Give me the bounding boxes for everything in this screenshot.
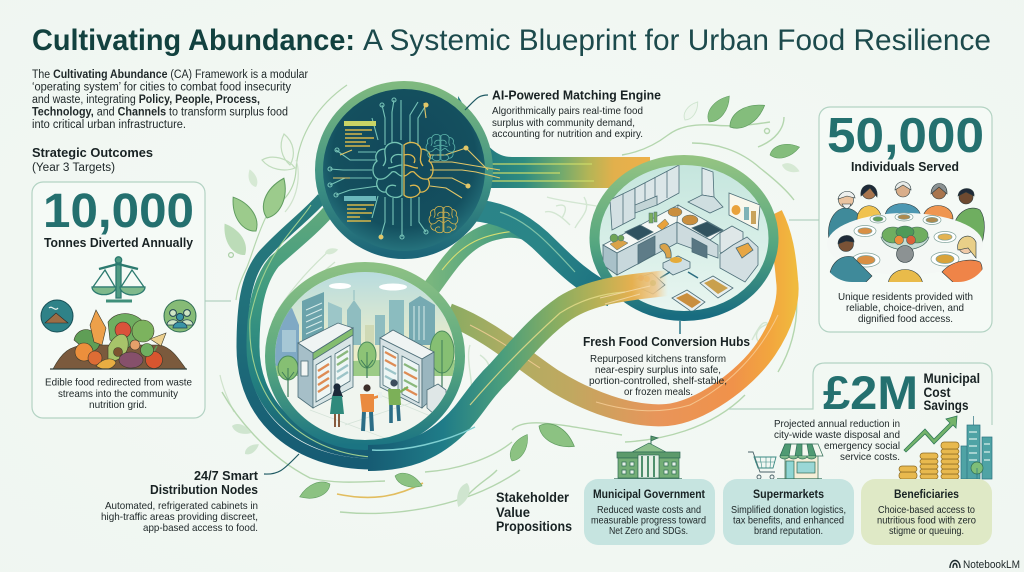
heading: stakeholder value propositions: Value [496, 505, 530, 520]
intro text block: and waste, integrating Policy, People, Process, [32, 94, 260, 106]
card: municipal government: Reduced waste costs and [597, 505, 701, 516]
icon: supermarket storefront [777, 444, 823, 479]
card caption: reliable, choice-driven, and [846, 302, 964, 314]
icon: rising trend arrow [904, 416, 957, 452]
table [828, 213, 983, 246]
callout: fresh food conversion hubs: near-espiry surplus into safe, [595, 364, 721, 376]
card caption: streams into the community [58, 388, 179, 400]
callout: 24/7 smart distribution nodes: app-based access to food. [143, 522, 258, 534]
counter run right [677, 205, 723, 240]
icon: compost circle [41, 300, 73, 332]
callout: 24/7 smart distribution nodes: high-traffic areas providing discreet, [101, 511, 258, 523]
trees [278, 331, 454, 398]
ribbon: main loop, lower right over hub [368, 283, 668, 458]
card: municipal government: Net Zero and SDGs. [609, 526, 688, 537]
stat label: Cost [924, 385, 951, 400]
vines: leaves top right [469, 92, 801, 395]
stat label [924, 371, 980, 413]
ribbon: AI engine to conversion hub [458, 96, 650, 188]
illustration: people at shared table [827, 182, 984, 286]
card: 10,000 tonnes diverted [32, 182, 205, 418]
city and park scene [270, 283, 455, 445]
card: £2M municipal cost savings [729, 363, 992, 479]
card: municipal government: Municipal Government [593, 489, 705, 501]
callout: fresh food conversion hubs [583, 335, 750, 398]
card: supermarkets: Simplified donation logistics, [731, 505, 846, 516]
card caption: Edible food redirected from waste [45, 376, 192, 388]
card caption [838, 291, 973, 325]
card caption [45, 376, 192, 411]
callout: 24/7 smart distribution nodes [101, 468, 259, 534]
person: man green [388, 379, 408, 423]
brain: central [373, 142, 433, 197]
stat: 10,000: 10,000 [43, 185, 194, 238]
illustration: food pile on compost [53, 310, 186, 369]
title: bold part: Cultivating Abundance: [32, 24, 355, 57]
person: man orange [360, 384, 382, 431]
leader: hub to caption [679, 321, 681, 334]
card: municipal government [584, 479, 715, 545]
meal tray 2 [700, 276, 733, 298]
heading: stakeholder value propositions [496, 490, 572, 534]
callout: 24/7 smart distribution nodes: Distribution Nodes [150, 482, 258, 497]
card caption: emergency social [824, 440, 900, 452]
callout: AI-powered matching engine [492, 88, 661, 140]
intro text block: into critical urban infrastructure. [32, 119, 186, 131]
callout: 24/7 smart distribution nodes: 24/7 Smart [194, 468, 259, 483]
card: 50,000 individuals served [819, 107, 992, 332]
card caption: Projected annual reduction in [774, 418, 900, 430]
menu board [729, 193, 760, 230]
ground [275, 360, 455, 378]
upper cabinets [610, 188, 635, 230]
stat label: Tonnes Diverted Annually [44, 236, 193, 250]
heading: stakeholder value propositions: Stakeholder [496, 490, 570, 505]
NotebookLM logo: NotebookLM [963, 559, 1020, 571]
card caption: nutrition grid. [89, 399, 147, 411]
card: beneficiaries: nutritious food with zero [877, 516, 976, 526]
icon: coin stacks [899, 442, 959, 479]
vending machine left [298, 323, 353, 408]
callout: fresh food conversion hubs: portion-controlled, shelf-stable, [589, 375, 727, 387]
card: supermarkets: Supermarkets [753, 489, 824, 501]
strategic outcomes heading: (Year 3 Targets) [32, 162, 115, 174]
callout: fresh food conversion hubs: Fresh Food Conversion Hubs [583, 335, 750, 349]
card caption: city-wide waste disposal and [774, 429, 900, 441]
icon: shopping cart [748, 452, 776, 479]
brain: small teal [426, 134, 455, 161]
card caption: Unique residents provided with [838, 291, 973, 303]
intro text block: Technology, and Channels to transform surplus food [32, 106, 288, 118]
callout: AI-powered matching engine: AI-Powered Matching Engine [492, 88, 661, 102]
skyline [270, 290, 435, 370]
ribbon: main loop, left side [242, 198, 372, 464]
title: regular part: A Systemic Blueprint for Urban Food Resilience [363, 24, 991, 57]
heading: stakeholder value propositions: Propositions [496, 519, 572, 534]
veggie crate [642, 272, 666, 294]
crate and arrows [660, 244, 671, 258]
intro text block: ‘operating system’ for cities to combat food insecurity [32, 82, 291, 94]
circle: smart distribution nodes illustration [270, 267, 460, 445]
callout: AI-powered matching engine: Algorithmically pairs real-time food [492, 105, 643, 117]
strategic outcomes heading: Strategic Outcomes [32, 145, 153, 160]
leader: AI engine [465, 95, 488, 110]
stat label: Individuals Served [851, 160, 959, 174]
icon: community circle [164, 300, 196, 332]
intro text block: The Cultivating Abundance (CA) Framework is a modular [32, 69, 308, 81]
card caption: service costs. [840, 451, 900, 463]
callout: fresh food conversion hubs: Repurposed kitchens transform [590, 353, 726, 365]
callout: fresh food conversion hubs: or frozen meals. [624, 386, 693, 398]
person: woman teal dress [330, 383, 344, 427]
plates [852, 213, 959, 267]
salad bowl [881, 226, 929, 250]
code panel: lower [344, 196, 376, 221]
diners: foreground [829, 235, 982, 286]
vending machine right [380, 330, 446, 414]
card: beneficiaries: Choice-based access to [878, 505, 975, 516]
callout: 24/7 smart distribution nodes: Automated, refrigerated cabinets in [105, 500, 258, 512]
card: supermarkets [723, 479, 854, 545]
circuit traces [328, 98, 428, 239]
meal tray 1 [672, 290, 705, 312]
ribbon: orange flow from hubs to nodes [448, 215, 788, 415]
card: beneficiaries [861, 479, 992, 545]
card caption: dignified food access. [858, 313, 953, 325]
ribbon: teal flow from AI engine to hub [472, 210, 612, 296]
vines: leaves left [218, 85, 347, 412]
counter run left [603, 205, 678, 253]
icon: government building [614, 436, 682, 479]
stat: 50,000: 50,000 [827, 109, 984, 163]
leader: distribution nodes [264, 454, 299, 474]
card: beneficiaries: stigme or queuing. [889, 526, 964, 537]
circle: fresh food conversion hub illustration [594, 160, 774, 316]
card: beneficiaries: Beneficiaries [894, 489, 959, 501]
intro text block [32, 69, 308, 131]
icon: city skyline [961, 416, 992, 479]
circle: AI matching engine illustration [319, 85, 500, 255]
clouds [329, 283, 407, 290]
kitchen interior [603, 165, 760, 312]
connector: left card to nodes [205, 300, 231, 302]
card caption [774, 418, 900, 463]
stat: £2M: £2M [823, 366, 918, 419]
stat label: Savings [924, 398, 968, 413]
ribbon: green link from nodes to teal flow [430, 229, 538, 290]
callout: AI-powered matching engine: surplus with community demand, [492, 117, 635, 129]
card: supermarkets: brand reputation. [754, 526, 823, 537]
vines: leaves bottom [222, 392, 745, 513]
food on counters [610, 208, 698, 250]
stat label: Municipal [924, 371, 980, 386]
callout: AI-powered matching engine: accounting for nutrition and expiry. [492, 128, 643, 140]
strategic outcomes heading [32, 145, 153, 174]
card: supermarkets: tax benefits, and enhanced [733, 516, 844, 526]
code panel: upper [344, 121, 376, 146]
icon: balance scale [92, 257, 145, 301]
connector: right card to hub [789, 219, 819, 221]
range hood [702, 168, 714, 197]
brain: small yellow [429, 206, 458, 233]
card: municipal government: measurable progress toward [591, 516, 706, 526]
combi oven [720, 226, 744, 253]
